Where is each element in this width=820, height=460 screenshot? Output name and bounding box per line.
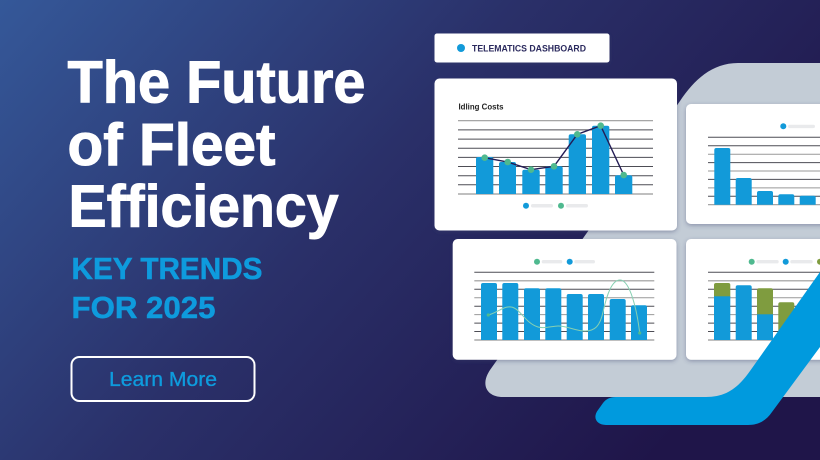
- header chip: telematics dashboard: [434, 34, 610, 62]
- grey backdrop shape: [485, 63, 820, 397]
- header chip: telematics dashboard: TELEMATICS DASHBOARD: [472, 44, 586, 54]
- subtitle: FOR 2025: [72, 290, 216, 325]
- panel: bottom-right stacked bar chart: [686, 239, 820, 360]
- panel: idling costs chart: Idling Costs: [458, 102, 504, 112]
- title: [68, 50, 366, 240]
- button: Learn More: Learn More: [109, 368, 217, 391]
- button: Learn More: [72, 357, 254, 401]
- subtitle: [72, 251, 262, 325]
- panel: top-right bar chart: [686, 104, 820, 224]
- subtitle: KEY TRENDS: [72, 251, 262, 286]
- panel: idling costs chart: [434, 78, 677, 230]
- title: The Future: [68, 50, 366, 116]
- blue swoosh shape: [595, 272, 820, 425]
- title: of Fleet: [68, 112, 276, 178]
- panel: bottom-centre bar chart with curve: [453, 239, 676, 360]
- title: Efficiency: [68, 174, 339, 240]
